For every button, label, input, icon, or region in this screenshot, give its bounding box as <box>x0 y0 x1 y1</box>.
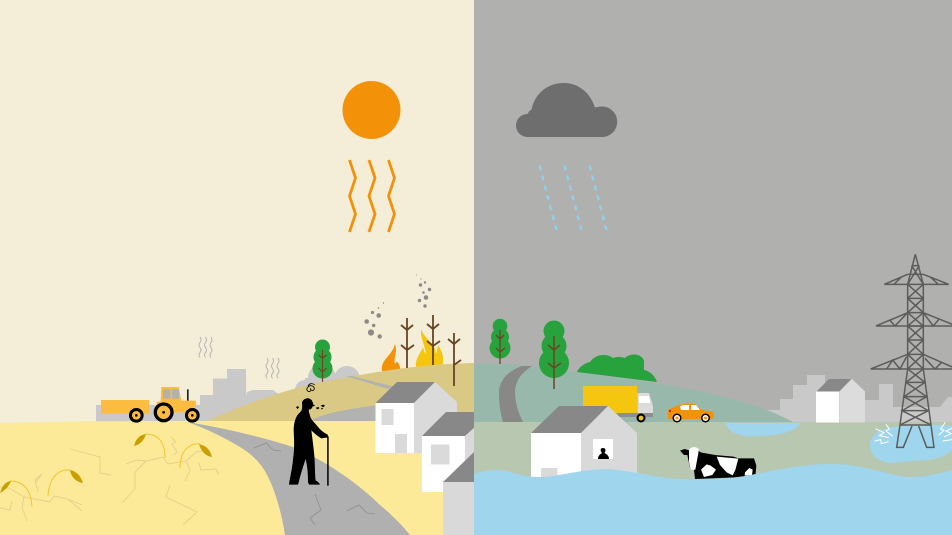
icon: rain cloud <box>516 83 617 137</box>
car <box>668 404 714 422</box>
delivery truck <box>583 386 653 422</box>
panel: flood scene <box>474 0 952 535</box>
cow in water <box>680 447 756 479</box>
field <box>0 421 474 535</box>
panel: drought scene <box>0 0 474 535</box>
window with person <box>593 439 613 459</box>
distant city <box>767 375 952 422</box>
hill <box>474 364 795 423</box>
wheat plants <box>0 434 212 507</box>
icon: heat waves <box>350 160 394 232</box>
tree 2 <box>539 320 569 389</box>
house 3 <box>443 452 474 535</box>
flood water <box>474 464 952 535</box>
icon: rain <box>540 166 607 232</box>
road cracks <box>254 443 375 525</box>
hill <box>205 363 474 422</box>
icon: yellow flame <box>416 329 443 367</box>
smoke <box>364 274 431 339</box>
hill road <box>499 366 532 422</box>
electricity pylon <box>871 254 952 447</box>
hill road <box>311 376 395 421</box>
icon: sun <box>342 81 400 139</box>
small pond <box>725 423 800 436</box>
pylon pond <box>870 425 952 463</box>
tractor with trailer <box>101 387 200 423</box>
field cracks <box>0 437 219 525</box>
flooded house <box>531 406 637 480</box>
main road <box>187 422 410 535</box>
tree 1 <box>490 319 510 364</box>
house 2 <box>422 412 474 492</box>
dead trees <box>401 315 461 386</box>
ground <box>474 422 952 535</box>
tree: green <box>312 340 332 383</box>
house 1 <box>376 382 457 453</box>
elderly person with cane <box>289 384 329 486</box>
icon: electric sparks <box>875 422 952 444</box>
icon: orange flame <box>382 344 401 371</box>
icon: rising heat lines <box>199 337 279 378</box>
bush <box>577 355 657 382</box>
grey bushes behind hill <box>295 364 360 400</box>
right house <box>816 379 865 422</box>
distant city <box>96 369 300 422</box>
